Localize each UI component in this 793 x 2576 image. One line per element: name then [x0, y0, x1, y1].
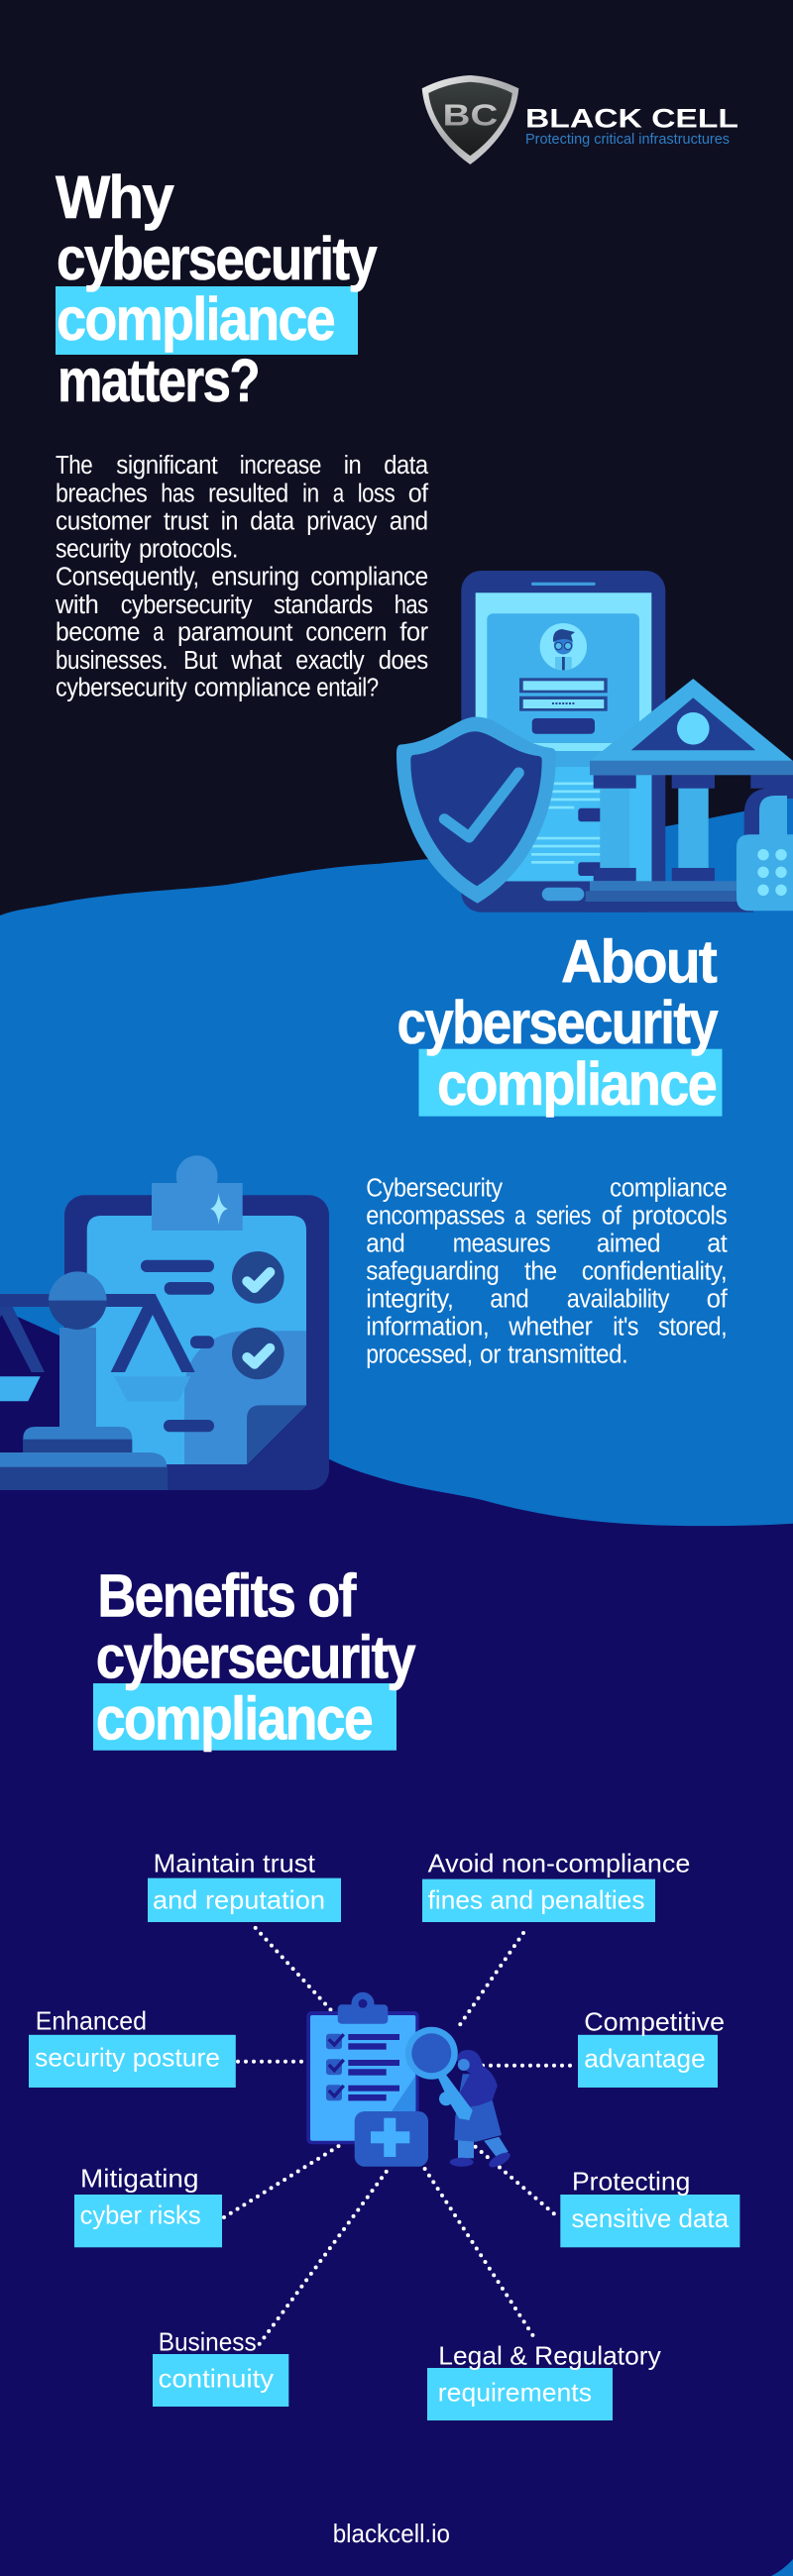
text block: about: compliance — [610, 1175, 728, 1203]
text block: about: and — [366, 1231, 404, 1258]
icon: phone — [461, 571, 665, 912]
text block: about: series — [536, 1203, 591, 1231]
text block: about: confidentiality, — [582, 1258, 727, 1286]
text block: introduction: in — [221, 508, 238, 536]
label: maintain trust and reputation — [148, 1849, 341, 1922]
footer: website: blackcell.io — [333, 2519, 450, 2548]
label: enhanced security posture — [29, 2005, 236, 2088]
label: mitigating cyber risks — [74, 2164, 222, 2247]
label: legal and regulatory requirements: requirements — [438, 2378, 592, 2408]
text block: about: encompasses — [366, 1203, 505, 1231]
text block: about: stored, — [658, 1314, 727, 1342]
heading: benefits of cybersecurity compliance: cybersecurity — [96, 1623, 416, 1690]
text block: about: Cybersecurity — [366, 1175, 503, 1203]
icon: scales of justice — [0, 1271, 195, 1490]
label: protecting sensitive data — [560, 2166, 739, 2247]
title: why cybersecurity compliance matters: cybersecurity — [57, 225, 378, 292]
text block: introduction: The — [56, 452, 93, 480]
text block: about: transmitted. — [508, 1342, 627, 1369]
icon: padlock — [736, 788, 793, 911]
text block: introduction: privacy — [306, 508, 378, 536]
text block: introduction: in — [344, 452, 361, 480]
text block: introduction: data — [384, 452, 429, 480]
label: legal and regulatory requirements — [427, 2341, 661, 2420]
icon: person — [450, 2050, 512, 2170]
text block: about: of — [707, 1286, 729, 1314]
text block: introduction: exactly — [295, 647, 365, 675]
text block: introduction: increase — [240, 452, 321, 480]
label: legal and regulatory requirements: Legal & Regulatory — [438, 2341, 661, 2371]
logo: Black Cell: BLACK CELL — [525, 103, 738, 133]
label: protecting sensitive data: Protecting — [572, 2166, 690, 2196]
text block: introduction: has — [395, 591, 428, 619]
label: enhanced security posture: security posture — [35, 2043, 220, 2073]
label: avoid non-compliance fines and penalties — [422, 1849, 690, 1922]
title: why cybersecurity compliance matters: Why — [56, 163, 174, 231]
text block: introduction: trust — [164, 508, 208, 536]
background: navy wave section — [0, 1309, 793, 2576]
text block: introduction: significant — [116, 452, 218, 480]
illustration: clipboard with scales — [0, 1155, 329, 1490]
text block: introduction: of — [408, 481, 429, 508]
text block: introduction: cybersecurity — [121, 591, 253, 619]
label: business continuity: Business — [159, 2327, 257, 2357]
label: protecting sensitive data: sensitive data — [571, 2203, 730, 2233]
heading: about cybersecurity compliance: compliance — [437, 1050, 716, 1118]
text block: introduction: become — [56, 619, 140, 647]
text block: about: safeguarding — [366, 1258, 499, 1286]
text block: about: or — [480, 1342, 502, 1369]
text block: introduction: But — [183, 647, 217, 675]
text block: introduction: and — [390, 508, 428, 536]
icon: clipboard — [64, 1155, 329, 1490]
icon: checklist clipboard — [306, 1992, 419, 2144]
text block: introduction: customer — [56, 508, 152, 536]
text block: about: it's — [613, 1314, 638, 1342]
illustration: phone login, shield, bank and lock — [396, 571, 793, 912]
text block: introduction: data — [250, 508, 295, 536]
label: maintain trust and reputation: and reputation — [153, 1884, 325, 1914]
text block: about: integrity, — [366, 1286, 453, 1314]
logo: Black Cell: BC — [443, 98, 498, 133]
heading: benefits of cybersecurity compliance — [93, 1562, 416, 1753]
text block: introduction: entail? — [316, 675, 379, 702]
label: competitive advantage: Competitive — [584, 2006, 725, 2036]
icon: shield with check — [396, 717, 556, 904]
text block: introduction: ensuring — [211, 564, 299, 591]
label: competitive advantage — [578, 2006, 725, 2088]
logo: Black Cell — [422, 75, 738, 164]
decorative corner: bottom right blue — [771, 2559, 793, 2576]
text block: introduction — [55, 452, 429, 702]
icon: magnifying glass — [405, 2027, 473, 2120]
text block: introduction: concern — [305, 619, 387, 647]
text block: about: protocols — [631, 1203, 727, 1231]
illustration: checklist, magnifier and person — [306, 1992, 512, 2170]
heading: benefits of cybersecurity compliance: Benefits of — [97, 1562, 357, 1630]
text block: introduction: security — [56, 536, 131, 564]
text block: introduction: compliance — [310, 564, 428, 591]
label: avoid non-compliance fines and penalties: Avoid non-compliance — [428, 1849, 690, 1878]
text block: introduction: paramount — [177, 619, 292, 647]
background: blue wave section — [0, 803, 793, 2576]
text block: about — [366, 1175, 729, 1369]
label: competitive advantage: advantage — [584, 2044, 706, 2074]
text block: about: and — [490, 1286, 528, 1314]
title: why cybersecurity compliance matters: matters? — [57, 347, 259, 414]
text block: introduction: cybersecurity — [56, 675, 187, 702]
text block: about: measures — [453, 1231, 550, 1258]
text block: introduction: standards — [274, 591, 373, 619]
text block: introduction: with — [55, 591, 98, 619]
logo: Black Cell: Protecting critical infrastructures — [525, 131, 730, 148]
text block: introduction: what — [230, 647, 282, 675]
text block: about: a — [514, 1203, 526, 1231]
text block: about: at — [707, 1231, 728, 1258]
text block: introduction: Consequently, — [56, 564, 199, 591]
text block: introduction: a — [153, 619, 165, 647]
text block: introduction: compliance — [194, 675, 311, 702]
title: why cybersecurity compliance matters — [56, 163, 378, 414]
icon: medical cross box — [355, 2111, 428, 2167]
label: mitigating cyber risks: cyber risks — [80, 2200, 201, 2229]
text block: introduction: a — [333, 481, 345, 508]
label: avoid non-compliance fines and penalties: fines and penalties — [428, 1884, 644, 1914]
title: why cybersecurity compliance matters: compliance — [57, 285, 334, 353]
text block: about: of — [602, 1203, 623, 1231]
heading: benefits of cybersecurity compliance: compliance — [96, 1685, 372, 1753]
text block: introduction: in — [302, 481, 319, 508]
heading: about cybersecurity compliance: cybersecurity — [396, 989, 719, 1056]
label: maintain trust and reputation: Maintain trust — [154, 1849, 316, 1878]
text block: introduction: for — [399, 619, 429, 647]
label: business continuity — [153, 2327, 288, 2407]
label: mitigating cyber risks: Mitigating — [80, 2164, 198, 2194]
text block: introduction: businesses. — [56, 647, 168, 675]
heading: about cybersecurity compliance — [396, 928, 722, 1118]
text block: introduction: has — [161, 481, 194, 508]
text block: about: information, — [366, 1314, 489, 1342]
text block: about: the — [524, 1258, 557, 1286]
icon: bank — [585, 679, 793, 912]
text block: introduction: does — [379, 647, 428, 675]
label: business continuity: continuity — [159, 2364, 274, 2394]
text block: introduction: resulted — [208, 481, 288, 508]
text block: introduction: loss — [358, 481, 395, 508]
text block: about: availability — [567, 1286, 670, 1314]
label: enhanced security posture: Enhanced — [36, 2005, 147, 2035]
heading: about cybersecurity compliance: About — [561, 928, 718, 996]
text block: about: processed, — [366, 1342, 473, 1369]
text block: about: aimed — [597, 1231, 660, 1258]
text block: about: whether — [508, 1314, 593, 1342]
dotted connector lines — [224, 1928, 574, 2344]
text block: introduction: breaches — [56, 481, 147, 508]
text block: introduction: protocols. — [139, 536, 238, 564]
